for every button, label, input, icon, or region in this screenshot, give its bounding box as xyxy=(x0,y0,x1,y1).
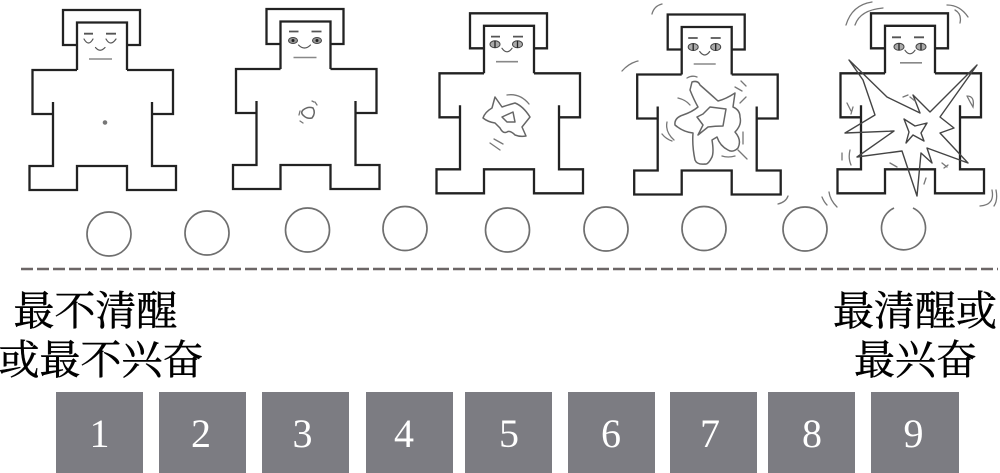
scale number boxes: 6 xyxy=(601,411,621,456)
figure 5: most aroused xyxy=(822,2,997,207)
scale number boxes: 7 xyxy=(700,411,720,456)
scale number boxes xyxy=(56,392,959,473)
label: least alert xyxy=(0,288,204,383)
scale number boxes: 8 xyxy=(802,411,822,456)
label: least alert: 最不清醒 xyxy=(14,288,178,334)
figure 4: highly aroused xyxy=(622,4,788,204)
figure 2: slightly aroused xyxy=(233,9,380,189)
scale number boxes: 9 xyxy=(904,411,924,456)
scale number boxes: 1 xyxy=(90,411,110,456)
scale number boxes: 5 xyxy=(499,411,519,456)
label: most alert: 最清醒或 xyxy=(833,288,997,334)
figure 1: least aroused xyxy=(30,10,176,190)
rating circles xyxy=(87,206,926,256)
label: most alert xyxy=(833,288,997,383)
scale number boxes: 3 xyxy=(292,411,312,456)
scale number boxes: 4 xyxy=(394,411,414,456)
scale number boxes: 2 xyxy=(191,411,211,456)
label: least alert: 或最不兴奋 xyxy=(0,337,204,383)
label: most alert: 最兴奋 xyxy=(854,337,977,383)
figure 3: moderately aroused xyxy=(436,13,583,193)
